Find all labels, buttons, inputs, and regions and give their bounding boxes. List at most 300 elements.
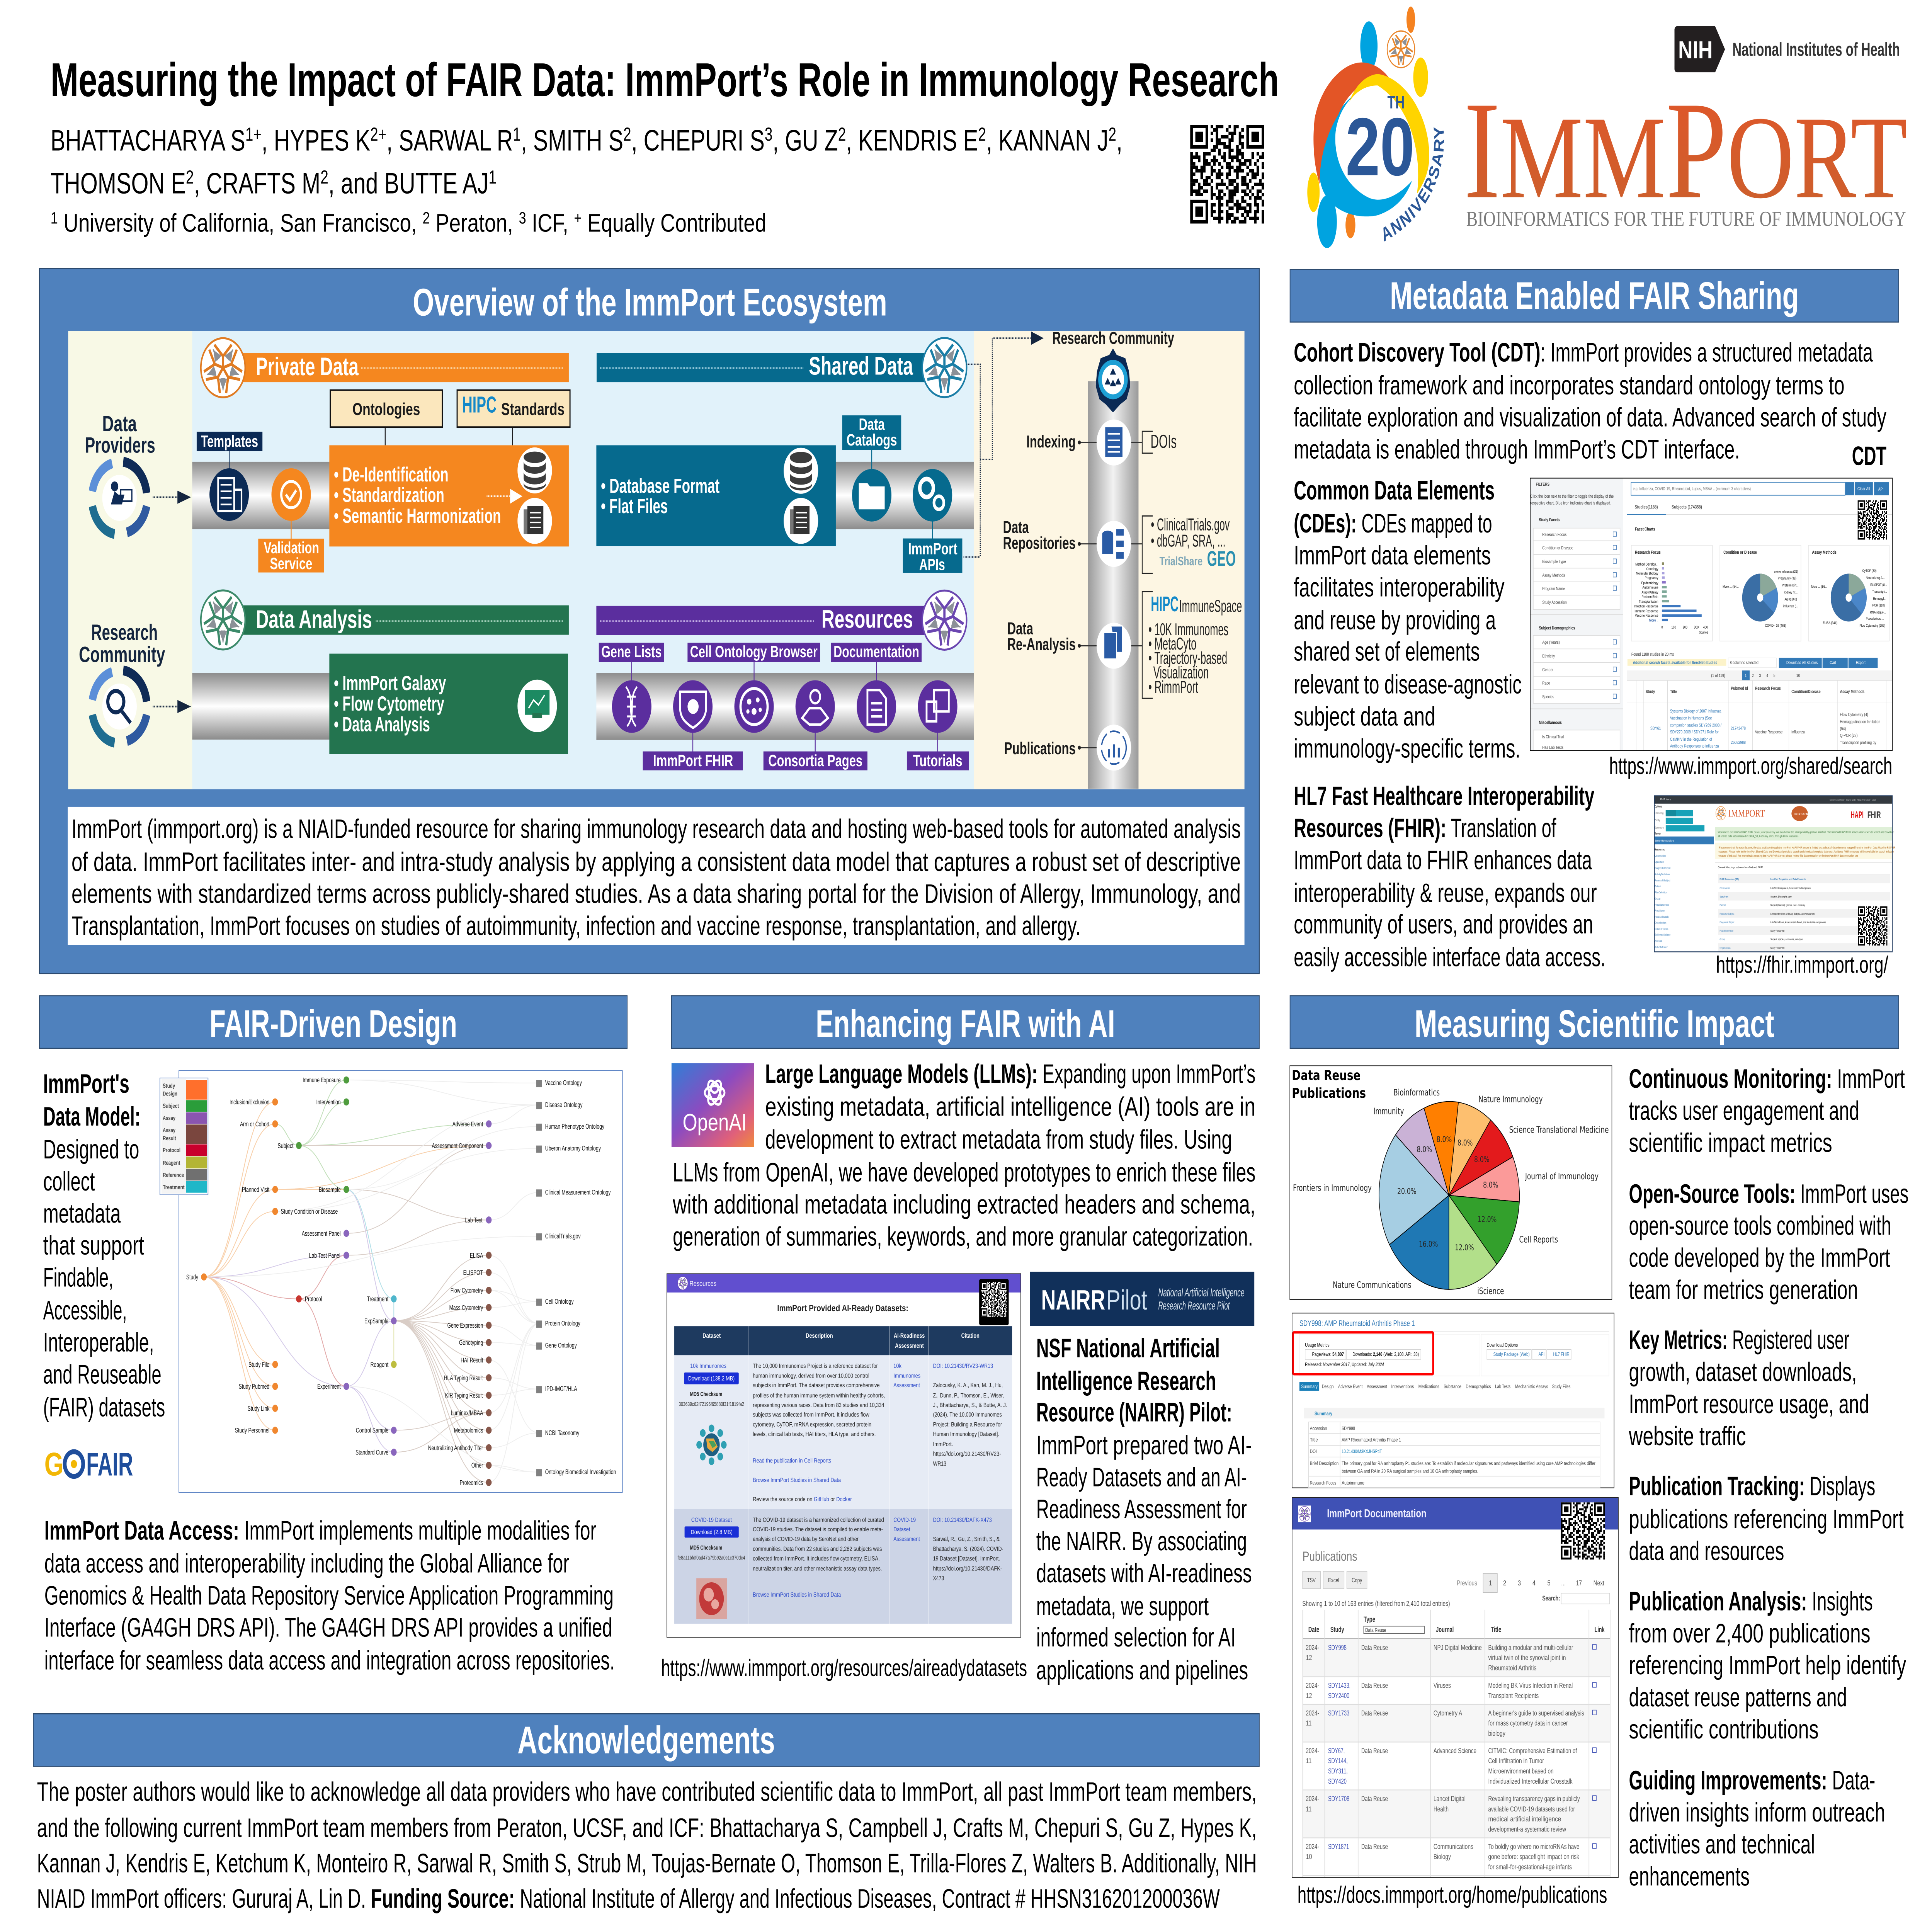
screenshot: AI-ready datasets table: fe8a11bfdf0ad47a79b92a0c1c370dc4 bbox=[678, 1555, 745, 1561]
authors and affiliations: 2+ bbox=[370, 126, 387, 146]
screenshot: ImmPort documentation publications: 4 bbox=[1532, 1579, 1536, 1587]
screenshot: CDT search interface: More ... (54... bbox=[1723, 585, 1739, 589]
screenshot: CDT search interface: Q-PCR (27) bbox=[1840, 733, 1857, 738]
publications table: Microenvironment based on bbox=[1488, 1767, 1554, 1775]
screenshot: AI-ready datasets table: Assessment bbox=[893, 1536, 920, 1542]
text block: NAIRR pilot: Readiness Assessment for bbox=[1036, 1495, 1248, 1525]
screenshot: CDT search interface: SDY270 2009 / SDY271 Role for bbox=[1670, 730, 1719, 735]
publications table: Modeling BK Virus Infection in Renal bbox=[1488, 1682, 1573, 1690]
screenshot: CDT search interface: Infection Response bbox=[1634, 604, 1658, 609]
panel header: measuring scientific impact bbox=[1290, 996, 1899, 1048]
publications table: SDY1733 bbox=[1328, 1709, 1349, 1717]
screenshot: CDT search interface: 21743478 bbox=[1731, 726, 1746, 731]
text block: NAIRR pilot: applications and pipelines bbox=[1036, 1656, 1248, 1686]
screenshot: HAPI FHIR server: Observation bbox=[1719, 886, 1730, 889]
text block: ImmPort data access: Interface (GA4GH DRS API). The GA4GH DRS API provides a unified bbox=[44, 1614, 612, 1643]
text block: ImmPort description: elements with standardized terms across publicly-shared studies. As a data sharing portal for the Division of Allergy, Immunology, and bbox=[71, 880, 1241, 910]
research community pipeline: Data bbox=[1007, 619, 1033, 639]
publications table: 11 bbox=[1306, 1719, 1311, 1727]
authors and affiliations: 2 bbox=[623, 126, 631, 146]
tree labels: Neutralizing Antibody Titer bbox=[428, 1444, 483, 1452]
screenshot: AI-ready datasets table: analysis of COVID-19 data by SeroNet and other bbox=[753, 1536, 859, 1542]
tree labels: Mass Cytometry bbox=[449, 1304, 483, 1311]
tree labels: Study Link bbox=[248, 1405, 270, 1412]
screenshot: AI-ready datasets table: DOI: 10.21430/DAFK-X473 bbox=[933, 1516, 992, 1523]
screenshot: CDT search interface: Research Focus bbox=[1635, 550, 1661, 555]
screenshot: AI-ready datasets table: COVID-19 studies. The dataset is compiled to enable meta- bbox=[753, 1526, 883, 1533]
data analysis section: Data Analysis bbox=[256, 607, 372, 634]
text block: large language models: generation of summaries, keywords, and more granular categorization. bbox=[673, 1223, 1253, 1252]
research community pipeline: • ClinicalTrials.gov bbox=[1151, 515, 1230, 535]
screenshot: AI-ready datasets table: 19 Dataset [Dataset]. ImmPort. bbox=[933, 1555, 1000, 1562]
screenshot: HAPI FHIR server: Specimen bbox=[1655, 861, 1664, 864]
screenshot: ImmPort documentation publications: Previous bbox=[1457, 1579, 1477, 1587]
screenshot: CDT search interface: 4 bbox=[1766, 673, 1768, 678]
screenshot: AI-ready datasets table bbox=[667, 1274, 1021, 1637]
screenshot: CDT search interface: Pubmed Id bbox=[1731, 685, 1748, 690]
screenshot: AI-ready datasets table: Z., Dunn, P., Thomson, E., Wiser, bbox=[933, 1392, 1004, 1399]
text block: impact bullets: activities and technical bbox=[1629, 1830, 1815, 1860]
screenshot: HAPI FHIR server: RelatedPerson bbox=[1655, 927, 1668, 930]
text block: impact bullets: open-source tools combined with bbox=[1629, 1212, 1891, 1242]
publications table: Transplant Recipients bbox=[1488, 1692, 1539, 1700]
text block: impact bullets: website traffic bbox=[1628, 1422, 1746, 1452]
text block: large language models bbox=[672, 1060, 1255, 1252]
data analysis section: • Data Analysis bbox=[334, 713, 430, 736]
tree labels: Metabolomics bbox=[454, 1427, 483, 1434]
screenshot: AI-ready datasets table: communities. Data from 22 studies and 2,282 subjects was bbox=[753, 1545, 882, 1552]
screenshot: CDT search interface: RNA seque... bbox=[1870, 610, 1886, 614]
screenshot: AI-ready datasets table: AI-Readiness bbox=[894, 1332, 925, 1339]
tree labels: Flow Cytometry bbox=[451, 1286, 483, 1294]
tree labels: Intervention bbox=[316, 1098, 341, 1106]
logo: NIH: National Institutes of Health bbox=[1732, 41, 1900, 61]
screenshot: HAPI FHIR server: IMMPORT bbox=[1728, 808, 1765, 819]
screenshot: ImmPort documentation publications: ImmPort Documentation bbox=[1327, 1507, 1426, 1520]
screenshot: AI-ready datasets table: Assessment bbox=[895, 1342, 924, 1349]
tree labels: Control Sample bbox=[356, 1427, 388, 1434]
authors and affiliations: Peraton, bbox=[430, 210, 519, 238]
private data section: • De-Identification bbox=[334, 463, 449, 486]
screenshot: CDT search interface: Condition/Disease bbox=[1791, 689, 1821, 694]
screenshot: AI-ready datasets table: J., Bhattacharya, S., & Butte, A. J. bbox=[933, 1401, 1007, 1408]
screenshot: HAPI FHIR server: Welcome to the ImmPort HAPI FHIR Server, an exploratory tool to advance the interoperability goals of ImmPort. The ImmPort HAPI FHIR server allows users to search and download bbox=[1718, 830, 1895, 834]
text block: NAIRR pilot bbox=[1036, 1334, 1252, 1686]
screenshot: HAPI FHIR server: ! Please note that, for each data set, the data available through the ImmPort HAPI FHIR server is limited to a subset of data elements mapped from the ImmPort Data Model to R5 FHIR bbox=[1718, 846, 1895, 849]
screenshot: AI-ready datasets table: 10k Immunomes bbox=[690, 1362, 726, 1369]
publications table: 10 bbox=[1306, 1853, 1312, 1861]
screenshot: CDT search interface: 2 bbox=[1752, 673, 1754, 678]
legend: Assay bbox=[163, 1115, 175, 1121]
QR code: poster bbox=[1190, 125, 1264, 223]
screenshot: HAPI FHIR server: releases of this tool. For more details on using the HAPI-FHIR Server, please review this documentation on the ImmPort FHIR documentation site bbox=[1718, 854, 1858, 857]
screenshot: AI-ready datasets table: The COVID-19 dataset is a harmonized collection of curated bbox=[753, 1516, 884, 1523]
text block: ImmPort's data model bbox=[43, 1070, 165, 1423]
screenshot: CDT search interface: Preterm Birth bbox=[1642, 595, 1658, 599]
screenshot: CDT search interface: 1 bbox=[1745, 673, 1747, 678]
screenshot: SDY998 usage metrics: SDY998 bbox=[1342, 1425, 1355, 1431]
text block: ImmPort's data model: Designed to bbox=[43, 1135, 139, 1165]
screenshot: SDY998 usage metrics: Research Focus bbox=[1310, 1480, 1336, 1486]
screenshot: AI-ready datasets table: Zalocusky, K. A., Kan, M. J., Hu, bbox=[933, 1382, 1003, 1389]
authors and affiliations: 2 bbox=[422, 210, 430, 228]
legend bbox=[160, 1078, 208, 1195]
screenshot: CDT search interface: Studies(1188) bbox=[1634, 504, 1658, 510]
screenshot: CDT search interface: ELISPOT (8... bbox=[1870, 583, 1887, 587]
text block: large language models: Large Language Models (LLMs): Expanding upon ImmPort’s bbox=[765, 1060, 1255, 1089]
screenshot: CDT search interface: Subject Demographics bbox=[1539, 625, 1575, 631]
publications table: SDY1433, bbox=[1328, 1682, 1350, 1690]
panel: overview of the ImmPort ecosystem bbox=[39, 269, 1259, 974]
screenshot: CDT search interface: 300 bbox=[1694, 625, 1699, 629]
research community pipeline bbox=[1003, 329, 1242, 789]
screenshot: AI-ready datasets table: Download (2.8 MB) bbox=[691, 1529, 733, 1536]
chart: data reuse publications pie: 8.0% bbox=[1417, 1145, 1432, 1154]
publications table: Data Reuse bbox=[1361, 1795, 1388, 1803]
tree labels: Inclusion/Exclusion bbox=[230, 1098, 269, 1106]
screenshot: CDT search interface: FILTERS bbox=[1536, 481, 1549, 487]
research community pipeline: • MetaCyto bbox=[1148, 635, 1197, 655]
screenshot: AI-ready datasets table: profiles of the human immune system within healthy cohorts, bbox=[753, 1392, 885, 1399]
authors and affiliations: , HYPES K bbox=[262, 124, 370, 157]
screenshot: CDT search interface: Additonal search facets available for SeroNet studies bbox=[1633, 660, 1717, 665]
text block: impact bullets: Continuous Monitoring: ImmPort bbox=[1629, 1065, 1905, 1094]
text block: impact bullets: tracks user engagement and bbox=[1629, 1097, 1859, 1126]
authors and affiliations: , and BUTTE AJ bbox=[328, 167, 488, 200]
text block: large language models: with additional metadata including extracted headers and schema, bbox=[672, 1190, 1255, 1220]
publications table: NPJ Digital Medicine bbox=[1434, 1644, 1482, 1651]
screenshot: HAPI FHIR server: Pretty bbox=[1655, 818, 1660, 822]
tree labels: ExpSample bbox=[364, 1317, 388, 1325]
screenshot: HAPI FHIR server: Server bbox=[1655, 832, 1661, 835]
tree nodes bbox=[201, 1077, 542, 1486]
research community: Community bbox=[79, 643, 166, 667]
screenshot: HAPI FHIR server: Practitioner bbox=[1655, 909, 1665, 912]
publications table: Viruses bbox=[1434, 1682, 1451, 1690]
publications table: 2024- bbox=[1306, 1682, 1319, 1690]
private data section: Private Data bbox=[256, 354, 359, 382]
screenshot: CDT search interface: Preterm Birt... bbox=[1782, 583, 1799, 587]
screenshot: AI-ready datasets table: Assessment bbox=[893, 1382, 920, 1389]
publications table: SDY998 bbox=[1328, 1644, 1347, 1651]
screenshot: CDT search interface: Assay Methods bbox=[1812, 550, 1837, 555]
screenshot: HAPI FHIR server: Server: Local Tester · Source Code · About This Server · Login bbox=[1830, 799, 1876, 801]
publications table: Revealing transparency gaps in publicly bbox=[1488, 1795, 1580, 1803]
publications table: 2024- bbox=[1306, 1644, 1319, 1651]
tree labels: Human Phenotype Ontology bbox=[545, 1122, 604, 1130]
text block: common data elements: Common Data Elements bbox=[1294, 476, 1495, 506]
screenshot: HAPI FHIR server: ResearchSubject bbox=[1655, 879, 1670, 882]
text block: ImmPort's data model: metadata bbox=[43, 1199, 122, 1229]
screenshot: CDT search interface: Pseudovirus ... bbox=[1866, 617, 1884, 621]
text block: ImmPort's data model: that support bbox=[43, 1231, 145, 1261]
tree labels: Planned Visit bbox=[242, 1185, 270, 1193]
screenshot: AI-ready datasets table: 303639c62f72196f65880f31f1819fa2 bbox=[679, 1401, 744, 1407]
screenshot: ImmPort documentation publications: ... bbox=[1561, 1579, 1566, 1587]
screenshot: HAPI FHIR server: Subject (Human): gender, race, ehtinicity bbox=[1770, 903, 1805, 906]
screenshot: CDT search interface: Transcripti... bbox=[1872, 590, 1887, 594]
screenshot: CDT search interface: PCR (110) bbox=[1872, 604, 1885, 607]
resources section bbox=[596, 590, 974, 771]
screenshot: HAPI FHIR server: Account bbox=[1655, 939, 1662, 942]
screenshot: SDY998 usage metrics: Released: November 2017, Updated: July 2024 bbox=[1305, 1362, 1384, 1367]
screenshot: AI-ready datasets table: collected from ImmPort. It includes flow cytometry, ELISA, bbox=[753, 1555, 879, 1562]
text block: HL7 FHIR: HL7 Fast Healthcare Interoperability bbox=[1294, 782, 1594, 812]
publications table: SDY1871 bbox=[1328, 1843, 1349, 1851]
publications table: Title bbox=[1491, 1625, 1501, 1634]
logo: ImmPort 20th anniversary: ANNIVERSARY bbox=[1379, 124, 1448, 246]
screenshot: CDT search interface: Research Focus bbox=[1755, 685, 1781, 690]
screenshot: CDT search interface: Molecular Biology bbox=[1636, 571, 1658, 576]
text block: large language models: existing metadata, artificial intelligence (AI) tools are in bbox=[765, 1093, 1255, 1122]
text block: HL7 FHIR bbox=[1294, 782, 1605, 973]
screenshot: AI-ready datasets table: Review the source code on GitHub or Docker bbox=[753, 1496, 852, 1503]
screenshot: CDT search interface: Ethnicity bbox=[1542, 653, 1555, 658]
screenshot: SDY998 usage metrics: Lab Tests bbox=[1495, 1384, 1510, 1389]
panel header: FAIR-driven design: FAIR-Driven Design bbox=[209, 1002, 457, 1045]
text block: cohort discovery tool: facilitate exploration and visualization of data. Advanced search of study bbox=[1294, 403, 1888, 433]
text block: ImmPort data access: interface for seamless data access and integration across repositories. bbox=[44, 1646, 615, 1676]
screenshot: CDT search interface: Condition or Disease bbox=[1723, 550, 1757, 555]
screenshot: CDT search interface: Hemaggl... bbox=[1873, 597, 1886, 601]
publications table: Type bbox=[1364, 1615, 1375, 1623]
chart: data reuse publications pie: Nature Immunology bbox=[1478, 1094, 1543, 1105]
text block: common data elements: relevant to disease-agnostic bbox=[1294, 670, 1522, 700]
tree labels: Study Condition or Disease bbox=[281, 1208, 338, 1215]
text block: impact bullets: data and resources bbox=[1629, 1537, 1784, 1567]
authors and affiliations: 1 bbox=[513, 126, 521, 146]
text block: cohort discovery tool: collection framework and incorporates standard ontology terms to bbox=[1294, 371, 1845, 401]
logo: NAIRR pilot: Research Resource Pilot bbox=[1158, 1300, 1231, 1313]
authors and affiliations: 1+ bbox=[245, 126, 262, 146]
screenshot: CDT search interface: Flow Cytometry (4) bbox=[1840, 712, 1868, 717]
research community pipeline: • 10K Immunomes bbox=[1148, 621, 1228, 640]
legend: Reagent bbox=[163, 1160, 180, 1166]
publications table: Lancet Digital bbox=[1434, 1795, 1466, 1803]
caption: CDT URL: https://www.immport.org/shared/search bbox=[1609, 754, 1892, 781]
text block: ImmPort data access bbox=[44, 1517, 615, 1676]
screenshot: AI-ready datasets table: 10k bbox=[893, 1362, 901, 1369]
screenshot: AI-ready datasets table: COVID-19 Dataset bbox=[691, 1516, 732, 1523]
text block: impact bullets: Open-Source Tools: ImmPort uses bbox=[1629, 1180, 1908, 1209]
screenshot: HAPI FHIR server: PractitionerRole bbox=[1719, 929, 1733, 932]
screenshot: CDT search interface: Aging (63) bbox=[1784, 597, 1797, 601]
text block: acknowledgements: The poster authors would like to acknowledge all data providers who have contributed scientific data to ImmPort, all past ImmPort team members, bbox=[37, 1778, 1257, 1808]
screenshot: HAPI FHIR server: Linking Identifiers of Study, Subject, and Arm/cohort bbox=[1770, 912, 1815, 915]
screenshot: CDT search interface: Condition or Disease bbox=[1542, 545, 1573, 550]
authors and affiliations: 2 bbox=[186, 169, 194, 189]
screenshot: SDY998 usage metrics: Summary bbox=[1315, 1411, 1332, 1416]
tree labels: Protein Ontology bbox=[545, 1319, 580, 1327]
research community pipeline: DOIs bbox=[1151, 433, 1177, 453]
publications table: Data Reuse bbox=[1365, 1627, 1386, 1633]
authors and affiliations: , bbox=[1116, 124, 1122, 157]
text block: impact bullets: scientific contributions bbox=[1629, 1716, 1819, 1745]
screenshot: CDT search interface: CyTOF (80) bbox=[1862, 569, 1876, 573]
tree labels: Gene Expression bbox=[447, 1321, 483, 1329]
screenshot: CDT search interface: Study bbox=[1646, 689, 1655, 694]
research community pipeline: GEO bbox=[1207, 546, 1236, 571]
screenshot: CDT search interface: influenza (... bbox=[1783, 604, 1798, 608]
screenshot: CDT search interface: Facet Charts bbox=[1635, 526, 1655, 532]
text block: impact bullets: code developed by the ImmPort bbox=[1629, 1244, 1891, 1274]
chart: data reuse publications pie: 8.0% bbox=[1474, 1155, 1490, 1164]
research community pipeline: • dbGAP, SRA, ... bbox=[1151, 532, 1226, 552]
resources section: Cell Ontology Browser bbox=[690, 644, 818, 662]
logo: GO FAIR: FAIR bbox=[86, 1447, 134, 1484]
text block: common data elements: ImmPort data elements bbox=[1294, 541, 1491, 571]
logo: NAIRR pilot: Pilot bbox=[1107, 1285, 1148, 1316]
screenshot: AI-ready datasets table: levels, clinical lab tests, HAI titers, HLA type, and others. bbox=[753, 1430, 876, 1437]
text block: impact bullets: from over 2,400 publications bbox=[1629, 1619, 1871, 1649]
tree labels: Treatment bbox=[367, 1295, 389, 1303]
publications table: Health bbox=[1434, 1805, 1449, 1813]
research community pipeline: Repositories bbox=[1003, 534, 1076, 554]
authors and affiliations: 2 bbox=[978, 126, 986, 146]
screenshot: SDY998 usage metrics: Title bbox=[1310, 1437, 1318, 1443]
chart: data reuse publications pie: Nature Communications bbox=[1333, 1280, 1411, 1290]
authors and affiliations: , CHEPURI S bbox=[631, 124, 765, 157]
publications table: A beginner's guide to supervised analysis bbox=[1488, 1709, 1584, 1717]
publications table: gone before: spaceflight impact on risk bbox=[1488, 1853, 1579, 1861]
data analysis section: • Flow Cytometry bbox=[334, 692, 444, 716]
screenshot: HAPI FHIR server: PractitionerRole bbox=[1655, 903, 1669, 906]
tree labels: IPD-IMGT/HLA bbox=[545, 1385, 577, 1393]
chart: data reuse publications pie: Cell Reports bbox=[1519, 1235, 1558, 1245]
text block: impact bullets: Key Metrics: Registered user bbox=[1629, 1326, 1850, 1355]
screenshot: CDT search interface: Study Facets bbox=[1539, 517, 1560, 522]
publications table: Communications bbox=[1434, 1843, 1473, 1851]
screenshot: ImmPort documentation publications: 5 bbox=[1548, 1579, 1551, 1587]
screenshot: HAPI FHIR server: Subject, Biosample: type bbox=[1770, 895, 1792, 898]
tree labels: Assessment Component bbox=[432, 1142, 483, 1150]
screenshot: CDT search interface: Title bbox=[1670, 689, 1677, 694]
chart: data reuse publications pie: Immunity bbox=[1374, 1106, 1404, 1116]
screenshot: CDT search interface: 8 columns selected bbox=[1730, 660, 1759, 665]
screenshot: CDT search interface: 100 bbox=[1671, 625, 1676, 629]
text block: acknowledgements: and the following current ImmPort team members from Peraton, UCSF, and ICF: Bhattacharya S, Campbell J, Crafts M, Chepuri S, Gu Z, Hypes K, bbox=[37, 1814, 1257, 1844]
screenshot: CDT search interface: 200 bbox=[1683, 625, 1687, 629]
screenshot: HAPI FHIR server: Organization bbox=[1655, 921, 1666, 924]
text block: ImmPort data access: Genomics & Health Data Repository Service Application Programming bbox=[44, 1582, 614, 1611]
tree labels: KIR Typing Result bbox=[445, 1391, 483, 1399]
publications table: To boldly go where no microRNAs have bbox=[1488, 1843, 1579, 1851]
research community pipeline: Research Community bbox=[1052, 329, 1174, 349]
screenshot: ImmPort documentation publications: 2 bbox=[1503, 1579, 1506, 1587]
text block: NAIRR pilot: the NAIRR. By associating bbox=[1036, 1527, 1247, 1557]
tree labels: Experiment bbox=[317, 1383, 341, 1390]
research community pipeline: HIPC bbox=[1151, 592, 1179, 616]
publications table: virtual twin of the synovial joint in bbox=[1488, 1654, 1566, 1662]
screenshot: SDY998 usage metrics: Study Files bbox=[1552, 1384, 1570, 1389]
caption: AI-ready datasets URL: https://www.immport.org/resources/aireadydatasets bbox=[661, 1656, 1027, 1682]
screenshot: SDY998 usage metrics: SDY998: AMP Rheumatoid Arthritis Phase 1 bbox=[1299, 1319, 1415, 1328]
publications table: Data Reuse bbox=[1361, 1644, 1388, 1651]
text block: ImmPort's data model: and Reuseable bbox=[43, 1361, 162, 1390]
screenshot: CDT search interface: Immune Response bbox=[1634, 609, 1658, 613]
screenshot: AI-ready datasets table: https://doi.org/10.21430/DAFK- bbox=[933, 1565, 1002, 1572]
screenshot: HAPI FHIR server: Patient bbox=[1719, 903, 1726, 906]
data providers bbox=[85, 412, 191, 534]
screenshot: AI-ready datasets table: DOI: 10.21430/RV23-WR13 bbox=[933, 1362, 993, 1369]
screenshot: CDT search interface: 0 bbox=[1662, 625, 1663, 629]
screenshot: HAPI FHIR server: Subject: species, arm name, arm type bbox=[1770, 938, 1803, 941]
publications table: Study bbox=[1330, 1625, 1344, 1634]
screenshot: CDT search interface bbox=[1530, 478, 1892, 750]
screenshot: CDT search interface: respective chart. Blue icon indicates chart is displayed. bbox=[1530, 500, 1611, 505]
tree labels: Ontology Biomedical Investigation bbox=[545, 1468, 616, 1476]
tree labels: Disease Ontology bbox=[545, 1101, 583, 1109]
text block: NAIRR pilot: Resource (NAIRR) Pilot: bbox=[1036, 1398, 1232, 1428]
shared data section: APIs bbox=[919, 557, 946, 575]
authors and affiliations: THOMSON E bbox=[51, 167, 185, 200]
publications table: 12 bbox=[1306, 1654, 1312, 1662]
screenshot: CDT search interface: SDY61 bbox=[1650, 726, 1661, 731]
text block: impact bullets: Guiding Improvements: Data- bbox=[1629, 1766, 1875, 1796]
screenshot: AI-ready datasets table: representing various races. Data from 83 studies and 10,334 bbox=[753, 1401, 884, 1408]
logo: NIH bbox=[1675, 26, 1900, 72]
publications table: Data Reuse bbox=[1361, 1747, 1388, 1755]
tree labels: Reagent bbox=[371, 1361, 389, 1368]
text block: impact bullets: dataset reuse patterns and bbox=[1629, 1684, 1847, 1713]
screenshot: CDT search interface: Vaccination in Humans (See bbox=[1670, 715, 1712, 721]
screenshot: CDT search interface: (54) bbox=[1840, 726, 1846, 731]
screenshot: AI-ready datasets table: Bhattacharya, S. (2024). COVID- bbox=[933, 1545, 1003, 1552]
text block: impact bullets: Publication Tracking: Displays bbox=[1629, 1472, 1875, 1502]
text block: ImmPort data access: ImmPort Data Access: ImmPort implements multiple modalities for bbox=[44, 1517, 597, 1546]
screenshot: AI-ready datasets table: Browse ImmPort Studies in Shared Data bbox=[753, 1591, 841, 1598]
tree labels: Immune Exposure bbox=[303, 1076, 341, 1084]
screenshot: CDT search interface: ELISA (341) bbox=[1823, 621, 1837, 625]
tree labels: Study Personnel bbox=[235, 1427, 269, 1434]
panel header: enhancing FAIR with AI bbox=[672, 996, 1259, 1048]
screenshot: ImmPort documentation publications: TSV bbox=[1307, 1577, 1316, 1584]
tree labels: Protocol bbox=[305, 1295, 322, 1303]
screenshot: AI-ready datasets table: (2024). The 10,000 Immunomes bbox=[933, 1411, 1002, 1418]
screenshot: HAPI FHIR server: all shared data sets released in DR54_V1, February, 2025, through FHIR resources. bbox=[1718, 835, 1799, 838]
logo: ImmPort 20th anniversary: 20 bbox=[1345, 101, 1415, 193]
publications table: 2024- bbox=[1306, 1747, 1319, 1755]
screenshot: SDY998 usage metrics: Interventions bbox=[1391, 1384, 1414, 1389]
screenshot: HAPI FHIR server: Specimen bbox=[1719, 895, 1728, 898]
publications table: Link bbox=[1595, 1625, 1605, 1634]
screenshot: CDT search interface: 10 bbox=[1796, 673, 1800, 678]
tree labels: HLA Typing Result bbox=[444, 1374, 483, 1382]
tree labels: Arm or Cohort bbox=[240, 1120, 270, 1128]
publications table: available COVID-19 datasets used for bbox=[1488, 1805, 1575, 1813]
shared data section: • Database Format bbox=[601, 475, 721, 498]
legend: Subject bbox=[163, 1103, 179, 1109]
screenshot: HAPI FHIR server: PlanDefinition bbox=[1655, 891, 1667, 894]
publications table: SDY144, bbox=[1328, 1757, 1348, 1765]
authors and affiliations bbox=[51, 124, 1122, 238]
shared data section: Catalogs bbox=[847, 432, 898, 451]
tree labels: Genotyping bbox=[459, 1338, 483, 1346]
legend: Reference bbox=[163, 1172, 184, 1179]
panel header: acknowledgements bbox=[33, 1714, 1259, 1766]
chart: data reuse publications pie: 8.0% bbox=[1458, 1138, 1473, 1148]
screenshot: ImmPort documentation publications bbox=[1292, 1498, 1618, 1878]
resources section: Consortia Pages bbox=[768, 753, 863, 771]
authors and affiliations: University of California, San Francisco, bbox=[58, 210, 422, 238]
text block: common data elements bbox=[1294, 476, 1522, 764]
authors and affiliations: , SMITH S bbox=[521, 124, 623, 157]
authors and affiliations: 2 bbox=[1108, 126, 1116, 146]
screenshot: CDT search interface: Antibody Responses to Influenza bbox=[1670, 743, 1719, 748]
screenshot: HAPI FHIR server: ActorDefinition bbox=[1655, 946, 1668, 949]
screenshot: SDY998 usage metrics: Summary bbox=[1301, 1384, 1318, 1389]
data providers: Data bbox=[102, 412, 137, 436]
